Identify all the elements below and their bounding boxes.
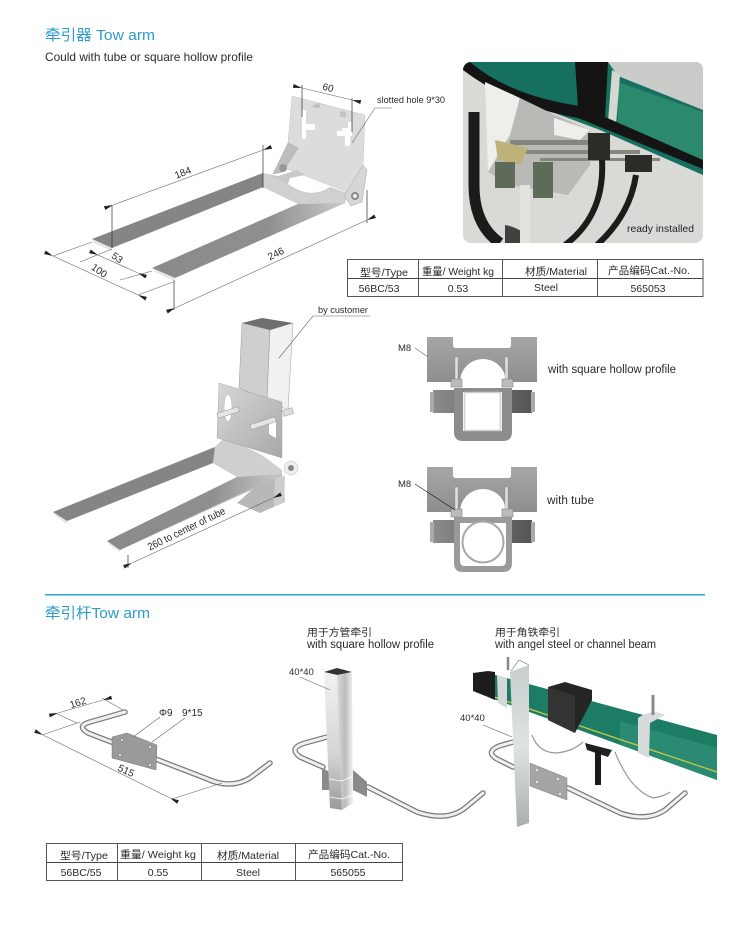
- labels: [69, 696, 203, 780]
- dimension labels: 184: [173, 165, 193, 182]
- drawing: tow arm bracket with dimensions: [53, 82, 445, 310]
- current collector: [585, 743, 612, 785]
- caption: with square hollow profile: [306, 639, 434, 651]
- upright plate with slots: [285, 96, 365, 192]
- table: 56BC/53 spec: 565053: [630, 283, 666, 295]
- drawing: with angle steel or channel beam: [460, 626, 717, 827]
- diagram: with square hollow profile: [398, 337, 676, 441]
- dimension labels: [89, 82, 335, 281]
- drawing: with square hollow profile: [289, 626, 483, 816]
- table: 56BC/53 spec: Steel: [534, 282, 558, 294]
- labels: 162: [69, 696, 88, 711]
- caption: [494, 626, 656, 651]
- table: 56BC/55 spec: 型号/Type: [60, 849, 108, 862]
- section title: tow bar: 牵引杆Tow arm: [45, 605, 150, 622]
- table: 56BC/55 spec: 材质/Material: [217, 849, 279, 862]
- fork: [53, 437, 282, 552]
- square tube: [324, 668, 353, 810]
- dimension labels: 60: [321, 82, 335, 95]
- callout: slotted hole: [352, 95, 445, 143]
- dimension labels: 100: [89, 262, 109, 281]
- labels: Φ9: [159, 708, 173, 719]
- divider rule: [45, 594, 705, 596]
- 40*40 label: 40*40: [460, 713, 485, 724]
- tube: [82, 712, 270, 784]
- caption: [306, 626, 434, 651]
- vertical profile strip: [508, 657, 529, 827]
- table: 56BC/55 spec: 产品编码Cat.-No.: [308, 848, 390, 861]
- dimension: 260 to center of tube: [128, 505, 228, 568]
- labels: 9*15: [182, 708, 203, 719]
- mounted plate: [530, 763, 567, 800]
- caption: ready installed: [627, 223, 694, 235]
- mounting plate and bolts: [217, 383, 298, 475]
- fork base and prongs: [92, 170, 347, 281]
- table: 56BC/53 spec: 重量/ Weight kg: [422, 265, 494, 278]
- side lugs: [273, 143, 367, 206]
- table: 56BC/53 spec: 56BC/53: [359, 283, 400, 295]
- label: with square hollow profile: with square hollow profile: [547, 364, 676, 376]
- table: 56BC/55 spec: 0.55: [148, 867, 168, 879]
- bar: [491, 742, 685, 817]
- tube below fork: [132, 476, 285, 563]
- conductor rail: [473, 671, 717, 780]
- bar: [295, 737, 483, 816]
- M8 label: [398, 343, 428, 357]
- drawing: tow bar with dimensions: [42, 696, 270, 799]
- 40*40 label: [289, 667, 330, 690]
- dimension: 260 to center of tube: 260 to center of tube: [146, 505, 228, 553]
- caption: 用于方管牵引: [307, 626, 372, 639]
- table: 56BC/53 spec: 型号/Type: [360, 266, 408, 279]
- labels: 515: [116, 763, 136, 780]
- plate: [322, 768, 367, 797]
- table: 56BC/55 spec: 565055: [330, 867, 366, 879]
- dimension labels: 246: [266, 246, 287, 263]
- subtitle: Could with tube or square hollow profile: [45, 50, 253, 64]
- table: 56BC/53 spec: [347, 260, 703, 296]
- label: with tube: with tube: [546, 495, 594, 507]
- square tube by customer: [239, 318, 293, 410]
- dimension lines: [42, 698, 222, 799]
- 40*40 label: [460, 713, 512, 737]
- diagram: with tube: [398, 467, 594, 572]
- callout: slotted hole: slotted hole 9*30: [377, 95, 445, 106]
- M8 label: M8: [398, 343, 411, 354]
- callout: by customer: by customer: [318, 305, 368, 315]
- M8 label: M8: [398, 479, 411, 490]
- square clamp: [454, 388, 512, 441]
- dimension labels: 53: [109, 251, 125, 266]
- caption: with angel steel or channel beam: [494, 639, 656, 651]
- drawing: bracket assembled with square tube: [53, 305, 370, 568]
- M8 label: [398, 479, 455, 510]
- table: 56BC/53 spec: 产品编码Cat.-No.: [608, 264, 690, 277]
- table: 56BC/55 spec: 56BC/55: [61, 867, 102, 879]
- table: 56BC/53 spec: 0.53: [448, 283, 468, 295]
- dimension lines: [53, 85, 367, 310]
- 40*40 label: 40*40: [289, 667, 314, 678]
- caption: 用于角铁牵引: [495, 626, 560, 639]
- table: 56BC/53 spec: 材质/Material: [525, 265, 587, 278]
- title: tow arm bracket: 牵引器 Tow arm: [45, 27, 155, 44]
- cables: [532, 735, 670, 798]
- callout: by customer: [279, 305, 370, 358]
- mounting plate: [112, 733, 157, 770]
- tube clamp and ring: [454, 517, 512, 572]
- table: 56BC/55 spec: 重量/ Weight kg: [120, 848, 196, 861]
- table: 56BC/55 spec: [46, 844, 403, 880]
- table: 56BC/55 spec: Steel: [236, 867, 260, 879]
- photo: ready installed: [463, 62, 703, 245]
